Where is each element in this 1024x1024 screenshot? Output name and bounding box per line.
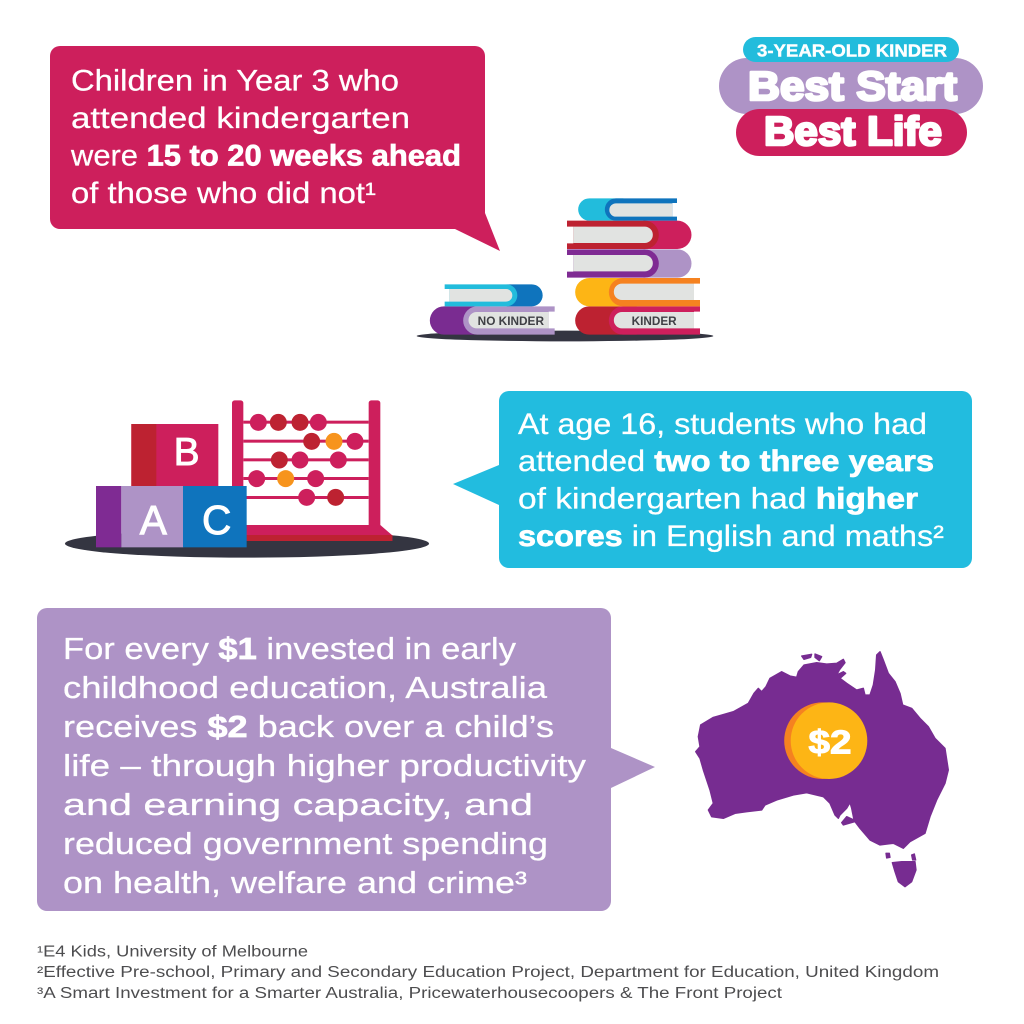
text: investment statement: childhood education, Australia [63,670,548,705]
block A: A [140,497,168,543]
shadow under blocks [65,530,429,558]
text: weeks ahead statement: Children in Year 3 who [71,64,399,98]
logo: 3-Year-Old Kinder Best Start Best Life [719,37,983,156]
footnotes: ²Effective Pre-school, Primary and Secondary Education Project, Department for Education, United Kingdom [37,964,939,981]
illustration: abacus and alphabet blocks [65,400,429,558]
coin: $2: $2 [808,724,852,760]
logo: 3-Year-Old Kinder Best Start Best Life: Best Start [748,63,957,109]
shadow under books [417,331,713,341]
text: investment statement: receives $2 back over a child’s [63,709,554,744]
text: investment statement: and earning capacity, and [63,787,533,822]
book: kinder purple [567,249,691,278]
footnotes: ³A Smart Investment for a Smarter Australia, Pricewaterhousecoopers & The Front Project [37,985,783,1002]
coin: $2 [784,702,867,779]
footnotes: ¹E4 Kids, University of Melbourne [37,944,308,960]
speech bubble: crimson [50,46,500,251]
text: age 16 statement: of kindergarten had higher [518,482,919,516]
logo: 3-Year-Old Kinder Best Start Best Life: Best Life [764,108,942,154]
book: kinder yellow [575,278,700,306]
text: weeks ahead statement [70,64,461,210]
book: no kinder top [445,284,543,306]
panel: kindergarten weeks ahead callout [50,46,500,251]
book: no kinder bottom [430,306,555,335]
illustration: book stacks, no kinder vs kinder [417,198,713,341]
text: investment statement: For every $1 invested in early [63,631,517,666]
block A [96,486,183,547]
book: no kinder bottom: NO KINDER [478,315,545,328]
text: investment statement [63,631,587,900]
book: kinder bottom: KINDER [632,315,677,328]
text: age 16 statement: scores in English and maths² [518,520,944,553]
block C [183,486,247,547]
panel: return on investment callout [37,608,655,911]
illustration: map of Australia with $2 coin [696,652,948,887]
speech bubble: lilac [37,608,655,911]
block B: B [174,431,200,474]
text: investment statement: life – through higher productivity [63,748,587,783]
block C: C [202,497,231,543]
book: kinder top blue [578,198,677,221]
book: kinder bottom [575,306,700,335]
book: kinder crimson [567,221,691,249]
map: Australia [696,652,948,887]
logo: 3-Year-Old Kinder Best Start Best Life: 3-YEAR-OLD KINDER [757,40,947,60]
text: investment statement: on health, welfare and crime³ [63,865,527,900]
text: weeks ahead statement: of those who did not¹ [71,177,376,210]
panel: age 16 scores callout [453,391,972,568]
text: investment statement: reduced government spending [63,826,548,861]
text: weeks ahead statement: attended kindergarten [71,102,410,135]
footnotes [37,944,939,1002]
text: age 16 statement: At age 16, students who had [518,408,927,441]
abacus [232,400,392,541]
text: age 16 statement: attended two to three years [518,445,934,478]
text: age 16 statement [518,408,944,553]
text: weeks ahead statement: were 15 to 20 weeks ahead [70,140,461,172]
block B [131,424,218,486]
speech bubble: cyan [453,391,972,568]
